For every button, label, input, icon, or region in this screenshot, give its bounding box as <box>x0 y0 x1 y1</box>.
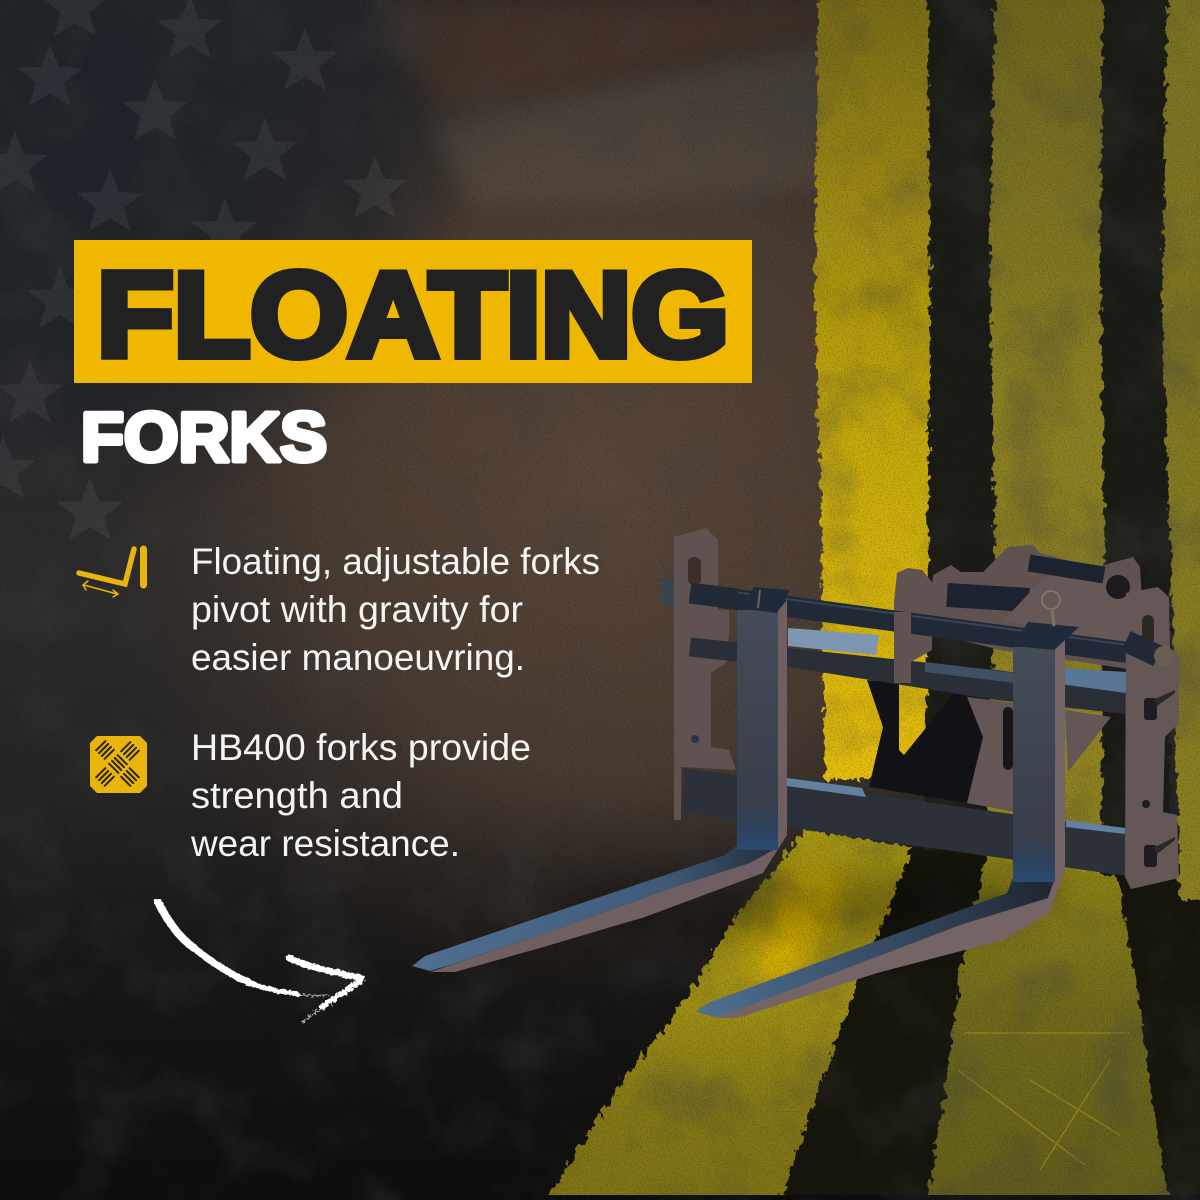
flag stars <box>0 0 408 540</box>
text block: HB400 feature: wear resistance. <box>190 823 460 864</box>
yellow stripe 2 lower <box>925 857 1171 1200</box>
subtitle: FORKS: FORKS <box>81 398 327 476</box>
bright worn patch on lower stripe <box>736 858 851 986</box>
product: floating pallet fork frame <box>412 528 1179 1018</box>
yellow stripe 2 upper <box>985 0 1105 880</box>
lower brown center plates <box>967 697 1111 812</box>
text block: floating forks feature: Floating, adjustable forks <box>191 541 600 582</box>
middle beam <box>690 628 1126 714</box>
scratches on lower stripe <box>958 1033 1130 1170</box>
yellow stripe 3 upper <box>1162 0 1200 900</box>
rear brown bracket <box>930 545 1142 670</box>
yellow stripe 1 lower <box>536 830 912 1200</box>
icon: floating fork with arrow <box>79 549 144 597</box>
top rod <box>688 586 1168 683</box>
arrow: hand-drawn pointer to forks <box>158 902 362 1022</box>
text block: HB400 feature: strength and <box>191 775 403 816</box>
text block: HB400 feature: HB400 forks provide <box>191 727 531 768</box>
lower cross beam <box>683 768 1126 876</box>
left side plate <box>661 528 737 820</box>
text block: floating forks feature <box>191 541 600 678</box>
right fork <box>696 608 1079 1018</box>
text block: floating forks feature: pivot with gravity for <box>191 589 523 630</box>
title box: FLOATING: FLOATING <box>97 248 729 382</box>
text block: floating forks feature: easier manoeuvring. <box>191 637 525 678</box>
right side plate <box>1125 587 1179 889</box>
icon: HB400 tread plate <box>90 736 147 793</box>
rear dark mount body <box>867 680 983 803</box>
front center lug plate <box>894 568 933 683</box>
yellow stripe 1 upper <box>815 0 930 780</box>
hazard stripes: yellow and black road bands <box>536 0 1200 1200</box>
text block: HB400 feature <box>190 727 531 864</box>
left fork <box>412 587 790 972</box>
